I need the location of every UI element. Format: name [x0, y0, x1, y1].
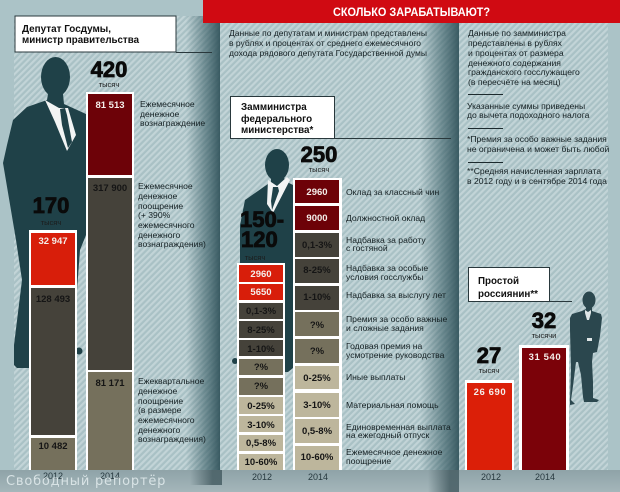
- note: methodology: и процентах от размера: [468, 48, 564, 58]
- heading: ordinary russian: Простой: [478, 276, 519, 287]
- label: monthly reward: денежное: [140, 109, 179, 119]
- label: monthly bonus: ежемесячного: [138, 220, 195, 230]
- label: quarterly bonus: ежемесячного: [138, 415, 195, 425]
- notes column: [467, 28, 610, 186]
- note: methodology: денежного содержания: [468, 58, 561, 68]
- label: quarterly bonus: денежного: [138, 425, 180, 435]
- total 2014: тысячи: [532, 331, 556, 340]
- year labels: 2012: [252, 472, 272, 482]
- label: monthly bonus: денежного: [138, 230, 180, 240]
- label: monthly bonus: Ежемесячное: [138, 181, 193, 191]
- icon: medium man silhouette: [232, 149, 293, 372]
- total 2014: 32: [532, 308, 556, 333]
- bar: deputy 2014: 81 513: [95, 100, 125, 111]
- bar: minister deputy 2014: ?%: [310, 346, 325, 357]
- labels: pay components: Иные выплаты: [346, 372, 405, 382]
- note: bonus footnote: *Премия за особо важные задания: [467, 134, 607, 144]
- label: quarterly bonus: вознаграждения): [138, 434, 206, 444]
- bar: minister deputy 2014: [293, 178, 342, 472]
- label: quarterly bonus: (в размере: [138, 405, 182, 415]
- bar: minister deputy 2014: 0-25%: [303, 373, 331, 384]
- intro text: Данные по депутатам и министрам представлены: [229, 28, 427, 38]
- total 2014: тысяч: [309, 165, 329, 174]
- heading: deputy minister: Замминистра: [241, 102, 307, 113]
- heading: ordinary russian: [468, 268, 572, 302]
- year labels: 2014: [308, 472, 328, 482]
- footer band: [0, 470, 620, 492]
- bar: ordinary 2012: 26 690: [474, 387, 506, 398]
- bar: minister deputy 2014: 0,5-8%: [302, 426, 333, 437]
- bar: ordinary 2014: [519, 345, 569, 472]
- intro text: дохода рядового депутата Государственной думы: [229, 48, 427, 58]
- heading: deputy minister: федерального: [241, 114, 312, 125]
- year labels: 2014: [535, 472, 555, 482]
- bar: minister deputy 2014: 9000: [306, 213, 328, 224]
- heading: deputy: [15, 16, 212, 52]
- man shirt and tie: [45, 100, 76, 151]
- bar: minister deputy 2012: 0,1-3%: [246, 306, 277, 317]
- labels: pay components: Ежемесячное денежное: [346, 447, 443, 457]
- intro text: в рублях и процентах от среднего ежемесячного: [229, 38, 421, 48]
- bar: minister deputy 2012: 10-60%: [245, 457, 278, 468]
- label: monthly bonus: денежное: [138, 191, 177, 201]
- bar: deputy 2012: [29, 230, 77, 472]
- note: methodology: (в пересчёте на месяц): [468, 77, 561, 87]
- bar: deputy 2014: 317 900: [93, 183, 127, 194]
- total 2012: тысяч: [41, 218, 61, 227]
- labels: pay components: Премия за особо важные: [346, 314, 448, 324]
- label: monthly bonus: поощрение: [138, 201, 183, 211]
- note: salary footnote: **Средняя начисленная зарплата: [467, 166, 601, 176]
- bar: minister deputy 2012: 5650: [250, 287, 272, 298]
- labels: pay components: на ежегодный отпуск: [346, 430, 429, 440]
- bar: deputy 2012: 32 947: [38, 236, 68, 247]
- icon: small man silhouette: [570, 292, 602, 405]
- total 2012: тысяч: [479, 366, 499, 375]
- watermark: Свободный репортёр: [6, 474, 166, 489]
- labels: pay components: Оклад за классный чин: [346, 187, 439, 197]
- total 2014: 250: [301, 142, 337, 167]
- bar: minister deputy 2012: ?%: [254, 362, 269, 373]
- label: monthly bonus: (+ 390%: [138, 210, 171, 220]
- bar: minister deputy 2012: 1-10%: [247, 344, 275, 355]
- bar: deputy 2014: 81 171: [95, 378, 125, 389]
- total 2012: [240, 207, 284, 262]
- labels: pay components: Материальная помощь: [346, 400, 439, 410]
- label: monthly bonus: вознаграждения): [138, 239, 206, 249]
- year labels: 2012: [43, 471, 63, 481]
- bar: ordinary 2014: 31 540: [529, 352, 561, 363]
- panel: deputy minister: [230, 96, 453, 472]
- labels: pay components: Надбавка за выслугу лет: [346, 290, 446, 300]
- total 2012: тысяч: [245, 253, 265, 262]
- note: methodology: представлены в рублях: [468, 38, 563, 48]
- note: before tax: до вычета подоходного налога: [467, 110, 590, 120]
- man shirt and tie: [585, 310, 592, 341]
- labels: pay components: усмотрение руководства: [346, 350, 445, 360]
- bar: deputy 2012: 10 482: [38, 441, 68, 452]
- bar: minister deputy 2012: 0,5-8%: [246, 438, 277, 449]
- header banner: [203, 0, 620, 23]
- note: bonus footnote: не ограничена и может быть любой: [467, 144, 610, 154]
- bar: minister deputy 2014: ?%: [310, 320, 325, 331]
- year labels: [43, 471, 555, 482]
- bar: minister deputy 2014: 1-10%: [303, 292, 331, 303]
- bar: minister deputy 2012: [237, 263, 285, 472]
- panel: ordinary russian: [465, 268, 602, 472]
- note: before tax: Указанные суммы приведены: [467, 101, 585, 111]
- labels: pay components: поощрение: [346, 456, 391, 466]
- bar: deputy 2012: 128 493: [36, 294, 70, 305]
- total 2012: 150-: [240, 207, 284, 232]
- labels: pay components: Надбавка за работу: [346, 235, 426, 245]
- man shirt and tie: [267, 177, 290, 213]
- bar: minister deputy 2012: 2960: [250, 269, 272, 280]
- labels: pay components: Единовременная выплата: [346, 422, 451, 432]
- heading: deputy: министр правительства: [22, 35, 139, 46]
- bar: minister deputy 2012: ?%: [254, 381, 269, 392]
- bar: minister deputy 2014: 8-25%: [303, 265, 331, 276]
- panel: deputy and minister: [3, 16, 212, 472]
- note: methodology: гражданского госслужащего: [468, 67, 580, 77]
- bar: deputy 2014: [86, 92, 134, 472]
- bar: minister deputy 2014: 0,1-3%: [302, 240, 333, 251]
- label: monthly reward: Ежемесячное: [140, 99, 195, 109]
- labels: pay components: с гостяной: [346, 243, 388, 253]
- year labels: 2014: [100, 471, 120, 481]
- total 2014: тысяч: [99, 80, 119, 89]
- year labels: 2012: [481, 472, 501, 482]
- note: methodology: Данные по замминистра: [468, 28, 566, 38]
- note: salary footnote: в 2012 году и в сентябре 2014 года: [467, 176, 607, 186]
- label: quarterly bonus: поощрение: [138, 396, 183, 406]
- bar: minister deputy 2014: 2960: [306, 187, 328, 198]
- total 2012: 170: [33, 193, 69, 218]
- total 2012: 120: [241, 227, 278, 252]
- total 2014: 420: [91, 57, 127, 82]
- heading: ordinary russian: россиянин**: [478, 289, 538, 300]
- labels: pay components: Надбавка за особые: [346, 263, 428, 273]
- heading: deputy minister: [230, 96, 451, 138]
- bar: minister deputy 2012: 3-10%: [247, 420, 275, 431]
- bar: minister deputy 2014: 3-10%: [303, 400, 331, 411]
- heading: deputy minister: министерства*: [241, 125, 313, 136]
- heading: deputy: Депутат Госдумы,: [22, 24, 111, 35]
- label: quarterly bonus: Ежеквартальное: [138, 376, 204, 386]
- bar: minister deputy 2012: 8-25%: [247, 325, 275, 336]
- header banner: СКОЛЬКО ЗАРАБАТЫВАЮТ?: [333, 6, 490, 19]
- bar: minister deputy 2012: 0-25%: [247, 401, 275, 412]
- total 2012: 27: [477, 343, 501, 368]
- labels: pay components: условия госслужбы: [346, 272, 423, 282]
- bar: minister deputy 2014: 10-60%: [301, 452, 334, 463]
- bar: ordinary 2012: [465, 380, 514, 472]
- label: quarterly bonus: денежное: [138, 386, 177, 396]
- labels: pay components: и сложные задания: [346, 323, 424, 333]
- label: monthly reward: вознаграждение: [140, 118, 205, 128]
- labels: pay components: Должностной оклад: [346, 213, 425, 223]
- labels: pay components: Годовая премия на: [346, 341, 422, 351]
- icon: large man silhouette: [3, 57, 86, 368]
